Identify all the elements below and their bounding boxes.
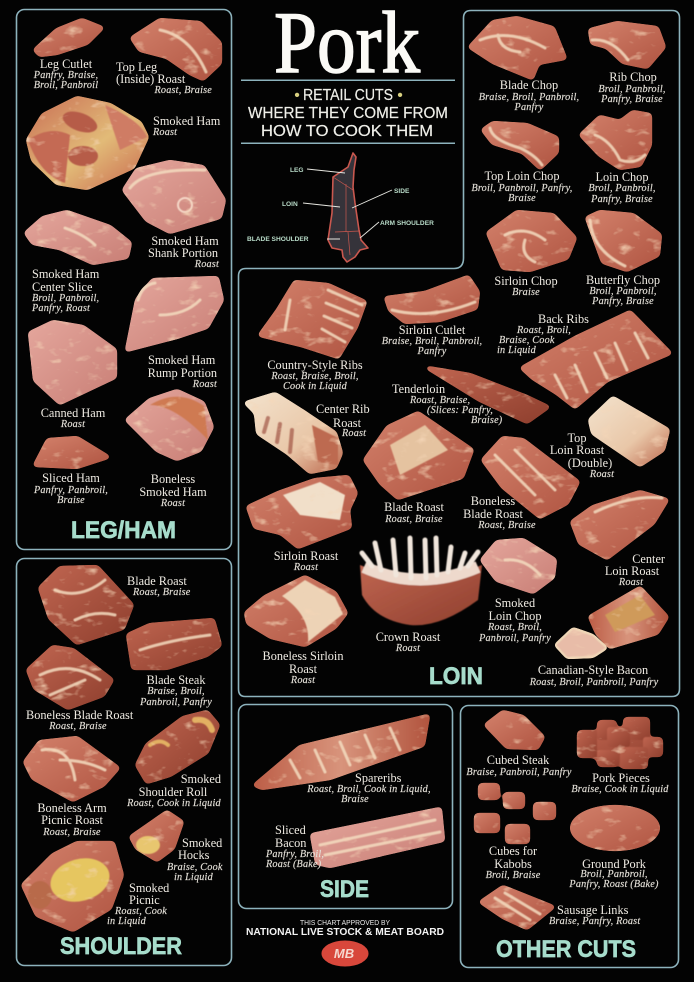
cut: spareribs: Spareribs	[355, 771, 402, 785]
cut: top loin roast double: Loin Roast	[550, 443, 605, 457]
cut: smoked picnic: Smoked	[129, 881, 169, 895]
cut: smoked ham center slice: Smoked Ham	[32, 267, 100, 281]
cut: sausage links: Sausage Links	[557, 903, 629, 917]
cut: top loin chop: Braise	[508, 193, 536, 204]
cut: loin chop	[581, 112, 656, 205]
cut: smoked ham rump portion: Roast	[192, 379, 218, 390]
heading: loin: LOIN	[429, 663, 483, 690]
cut: center loin roast: Center	[632, 552, 665, 566]
cut: smoked picnic	[23, 843, 169, 930]
cut: top loin chop: Top Loin Chop	[485, 169, 559, 183]
cut: sirloin roast	[248, 477, 356, 573]
cut: back ribs: Back Ribs	[538, 312, 589, 326]
cut: center rib roast: Roast	[341, 428, 367, 439]
cut: top leg roast	[116, 20, 220, 96]
cut: top leg roast: (Inside) Roast	[116, 72, 186, 86]
cut: sliced bacon	[265, 809, 443, 870]
cut: smoked ham center slice	[26, 212, 130, 314]
cut: boneless smoked ham: Smoked Ham	[139, 485, 207, 499]
cut: smoked shoulder roll: Roast, Cook in Liquid	[126, 798, 222, 809]
cut: sirloin chop: Braise	[512, 287, 540, 298]
cut: sliced bacon: Bacon	[275, 836, 306, 850]
other cuts panel outline	[460, 706, 678, 968]
cut: ground pork: Panfry, Roast (Bake)	[568, 879, 659, 890]
divider rule bottom	[241, 142, 455, 144]
cut: blade steak: Panbroil, Panfry	[139, 697, 212, 708]
cut: leg cutlet: Leg Cutlet	[40, 57, 93, 71]
cut: smoked ham	[28, 98, 221, 188]
cut: canadian-style bacon	[529, 588, 667, 688]
cut: butterfly chop: Butterfly Chop	[586, 273, 660, 287]
subtitle: RETAIL CUTS	[303, 87, 393, 104]
cut: center loin roast: Loin Roast	[605, 564, 660, 578]
cut: center rib roast: Center Rib	[316, 402, 370, 416]
cut: blade steak: Blade Steak	[146, 673, 206, 687]
cut: smoked hocks: Smoked	[182, 836, 222, 850]
cut: boneless blade roast: Boneless Blade Roast	[26, 708, 134, 722]
cut: smoked loin chop	[478, 540, 555, 644]
cut: boneless blade roast: Roast, Braise	[48, 721, 107, 732]
panel: side	[238, 704, 452, 908]
cut: smoked ham center slice: Panfry, Roast	[31, 303, 91, 314]
cut: smoked ham shank portion: Shank Portion	[148, 246, 218, 260]
cut: smoked hocks: Hocks	[178, 848, 210, 862]
cut: sirloin cutlet: Panfry	[417, 346, 447, 357]
cut: blade roast: Roast, Braise	[132, 587, 191, 598]
cut: cubed steak	[466, 712, 572, 778]
cut: center loin roast: Roast	[618, 577, 644, 588]
cut: boneless blade roast: Roast, Braise	[477, 520, 536, 531]
cut: spareribs: Roast, Broil, Cook in Liquid,	[306, 784, 431, 795]
cut: leg cutlet: Panfry, Braise,	[33, 70, 98, 81]
cut: boneless blade roast	[26, 647, 134, 732]
cut: boneless smoked ham	[127, 391, 212, 509]
cut: loin chop: Loin Chop	[596, 170, 648, 184]
cut: cubed steak: Cubed Steak	[487, 753, 550, 767]
heading: side: SIDE	[320, 876, 369, 903]
cut: sliced ham: Panfry, Panbroil,	[33, 485, 108, 496]
cut: butterfly chop: Broil, Panbroil,	[589, 286, 657, 297]
cut: blade chop: Braise, Broil, Panbroil,	[479, 92, 579, 103]
cut: blade steak	[128, 620, 220, 708]
cut: crown roast	[360, 538, 482, 654]
cut: smoked ham shank portion	[124, 162, 224, 270]
cut: spareribs	[255, 716, 431, 805]
cut: sausage links	[481, 887, 641, 928]
cut: tenderloin: Braise)	[471, 415, 503, 426]
cut: back ribs	[497, 312, 670, 407]
cut: center rib roast	[246, 394, 370, 472]
cut: canned ham	[30, 322, 115, 430]
cut: smoked loin chop: Roast, Broil,	[487, 622, 542, 633]
cut: smoked loin chop: Loin Chop	[489, 609, 541, 623]
cut: cubes for kabobs	[474, 783, 556, 881]
panel: title block	[241, 0, 455, 262]
cut: rib chop: Broil, Panbroil,	[598, 84, 666, 95]
cut: top loin roast double	[550, 398, 668, 480]
approved by line: THIS CHART APPROVED BY	[300, 920, 390, 927]
cut: loin chop: Panfry, Braise	[590, 194, 653, 205]
cut: canned ham: Canned Ham	[41, 406, 106, 420]
cut: sliced ham: Sliced Ham	[42, 471, 100, 485]
subtitle: •	[294, 87, 300, 104]
cut: smoked hocks: Braise, Cook	[167, 862, 223, 873]
logo: MB oval	[322, 940, 368, 966]
cut: smoked ham rump portion: Smoked Ham	[148, 353, 216, 367]
cut: cubes for kabobs: Kabobs	[494, 857, 532, 871]
cut: blade chop: Blade Chop	[500, 78, 558, 92]
cut: smoked loin chop: Panbroil, Panfry	[478, 633, 551, 644]
cut: tenderloin: Roast, Braise,	[409, 395, 470, 406]
cut: boneless blade roast: Boneless	[471, 494, 515, 508]
cut: sirloin cutlet	[382, 277, 482, 357]
cut: top leg roast: Top Leg	[116, 60, 157, 74]
cut: rib chop: Rib Chop	[609, 70, 657, 84]
cut: boneless sirloin roast: Roast	[289, 662, 318, 676]
cut: sirloin roast: Roast	[293, 562, 319, 573]
panel: other cuts	[460, 706, 678, 968]
cut: rib chop	[590, 23, 666, 105]
cut: canadian-style bacon: Roast, Broil, Panbroil, Panfry	[529, 677, 659, 688]
cut: spareribs: Braise	[341, 794, 369, 805]
pig carcass diagram: LEG	[290, 167, 304, 174]
cut: center rib roast: Roast	[333, 416, 362, 430]
cut: cubed steak: Braise, Panbroil, Panfry	[466, 767, 572, 778]
heading: other cuts: OTHER CUTS	[496, 936, 636, 963]
cut: top loin roast double: Roast	[589, 469, 615, 480]
cut: boneless smoked ham: Boneless	[151, 472, 195, 486]
cut: cubes for kabobs: Cubes for	[489, 844, 537, 858]
cut: ground pork: Broil, Panbroil,	[580, 869, 648, 880]
cut: country-style ribs: Country-Style Ribs	[267, 358, 363, 372]
cut: tenderloin: Tenderloin	[392, 382, 445, 396]
cut: top loin chop	[471, 123, 573, 204]
cut: back ribs: Braise, Cook	[499, 335, 555, 346]
cut: sliced bacon: Sliced	[275, 823, 306, 837]
cut: blade roast: Blade Roast	[127, 574, 187, 588]
logo: MB oval: MB	[334, 946, 354, 961]
cut: sliced bacon: Roast (Bake)	[265, 859, 322, 870]
cut: smoked loin chop: Smoked	[495, 596, 535, 610]
cut: butterfly chop: Panfry, Braise	[591, 296, 654, 307]
cut: top loin roast double: (Double)	[568, 456, 612, 470]
cut: sirloin chop: Sirloin Chop	[494, 274, 558, 288]
cut: sirloin chop	[488, 212, 575, 298]
cut: canadian-style bacon: Canadian-Style Bacon	[538, 663, 648, 677]
cut: country-style ribs: Roast, Braise, Broil,	[270, 371, 359, 382]
subtitle	[248, 87, 448, 140]
cut: smoked ham center slice: Broil, Panbroil,	[32, 293, 99, 304]
pig carcass diagram: LOIN	[282, 201, 298, 208]
subtitle: •	[397, 87, 403, 104]
cut: sirloin roast: Sirloin Roast	[274, 549, 339, 563]
heading: shoulder: SHOULDER	[60, 933, 182, 960]
cut: sliced bacon: Panfry, Broil,	[265, 849, 324, 860]
cut: boneless arm picnic roast: Boneless Arm	[37, 801, 107, 815]
cut: leg cutlet: Broil, Panbroil	[34, 80, 98, 91]
cut: sausage links: Braise, Panfry, Roast	[549, 916, 641, 927]
cut: boneless sirloin roast: Boneless Sirloin	[263, 649, 343, 663]
cut: boneless sirloin roast	[246, 577, 346, 686]
cut: smoked shoulder roll	[126, 712, 222, 809]
cut: pork pieces	[571, 717, 669, 795]
panel: leg/ham	[16, 10, 232, 550]
cut: country-style ribs	[260, 282, 365, 392]
cut: rib chop: Panfry, Braise	[600, 94, 663, 105]
pig carcass diagram	[247, 153, 434, 262]
cut: back ribs: in Liquid	[497, 345, 537, 356]
cut: boneless blade roast	[463, 438, 578, 531]
chops and loin panel outline	[238, 10, 680, 696]
cut: sirloin cutlet: Braise, Broil, Panbroil,	[382, 336, 482, 347]
cut: blade roast: Roast, Braise	[384, 514, 443, 525]
cut: blade steak: Braise, Broil,	[147, 686, 205, 697]
pig carcass diagram: SIDE	[394, 188, 410, 195]
cut: smoked picnic: Roast, Cook	[114, 906, 167, 917]
panel: shoulder	[16, 558, 232, 966]
cut: smoked shoulder roll: Smoked	[181, 772, 221, 786]
cut: smoked picnic: Picnic	[129, 893, 160, 907]
cut: blade roast: Blade Roast	[384, 500, 444, 514]
cut: boneless blade roast: Blade Roast	[463, 507, 523, 521]
cut: smoked ham: Smoked Ham	[153, 114, 221, 128]
cut: smoked ham center slice: Center Slice	[32, 280, 93, 294]
cut: smoked shoulder roll: Shoulder Roll	[139, 785, 208, 799]
cut: ground pork	[568, 805, 660, 890]
cut: boneless smoked ham: Roast	[160, 498, 186, 509]
panel: chops and loin	[238, 10, 680, 696]
cut: blade roast	[365, 413, 472, 525]
cut: boneless arm picnic roast	[25, 738, 118, 838]
cut: sliced ham: Braise	[57, 495, 85, 506]
cut: smoked ham rump portion: Rump Portion	[148, 366, 217, 380]
side panel outline	[238, 704, 452, 908]
pig carcass diagram: BLADE SHOULDER	[247, 236, 309, 243]
cut: sliced ham	[33, 438, 108, 506]
cut: leg cutlet	[33, 20, 102, 91]
cut: canned ham: Roast	[60, 419, 86, 430]
leg/ham panel outline	[16, 10, 232, 550]
cut: smoked hocks	[131, 812, 223, 883]
cut: smoked ham shank portion: Roast	[194, 259, 220, 270]
cut: country-style ribs: Cook in Liquid	[283, 381, 348, 392]
pig carcass diagram: ARM SHOULDER	[380, 220, 434, 227]
cut: blade chop	[470, 18, 579, 113]
cut: back ribs: Roast, Broil,	[516, 325, 571, 336]
subtitle: WHERE THEY COME FROM	[248, 105, 448, 122]
cut: tenderloin	[392, 368, 548, 426]
cut: boneless arm picnic roast: Picnic Roast	[41, 813, 103, 827]
cut: ground pork: Ground Pork	[582, 857, 647, 871]
cut: cubes for kabobs: Broil, Braise	[486, 870, 541, 881]
approval credit	[246, 920, 444, 966]
cut: smoked picnic: in Liquid	[107, 916, 147, 927]
cut: top leg roast: Roast, Braise	[154, 85, 212, 96]
cut: smoked ham shank portion: Smoked Ham	[151, 234, 219, 248]
cut: center loin roast	[572, 492, 667, 588]
cut: loin chop: Broil, Panbroil,	[588, 183, 656, 194]
divider rule top	[241, 80, 455, 81]
cut: smoked hocks: in Liquid	[174, 872, 214, 883]
heading: leg/ham: LEG/HAM	[71, 517, 176, 544]
cut: tenderloin: (Slices: Panfry,	[427, 405, 493, 416]
cut: pork pieces: Pork Pieces	[592, 771, 650, 785]
cut: pork pieces: Braise, Cook in Liquid	[571, 784, 669, 795]
cut: blade chop: Panfry	[514, 102, 544, 113]
cut: sirloin cutlet: Sirloin Cutlet	[399, 323, 466, 337]
cut: smoked ham: Roast	[152, 127, 178, 138]
shoulder panel outline	[16, 558, 232, 966]
cut: boneless sirloin roast: Roast	[290, 675, 316, 686]
cut: butterfly chop	[586, 212, 660, 307]
subtitle: HOW TO COOK THEM	[261, 123, 433, 140]
cut: top loin roast double: Top	[568, 431, 586, 445]
board name: NATIONAL LIVE STOCK & MEAT BOARD	[246, 926, 444, 938]
cut: blade roast	[40, 567, 191, 643]
cut: boneless arm picnic roast: Roast, Braise	[42, 827, 101, 838]
cut: crown roast: Crown Roast	[376, 630, 441, 644]
cut: top loin chop: Broil, Panbroil, Panfry,	[471, 183, 573, 194]
cut: crown roast: Roast	[395, 643, 421, 654]
cut: smoked ham rump portion	[127, 278, 222, 390]
